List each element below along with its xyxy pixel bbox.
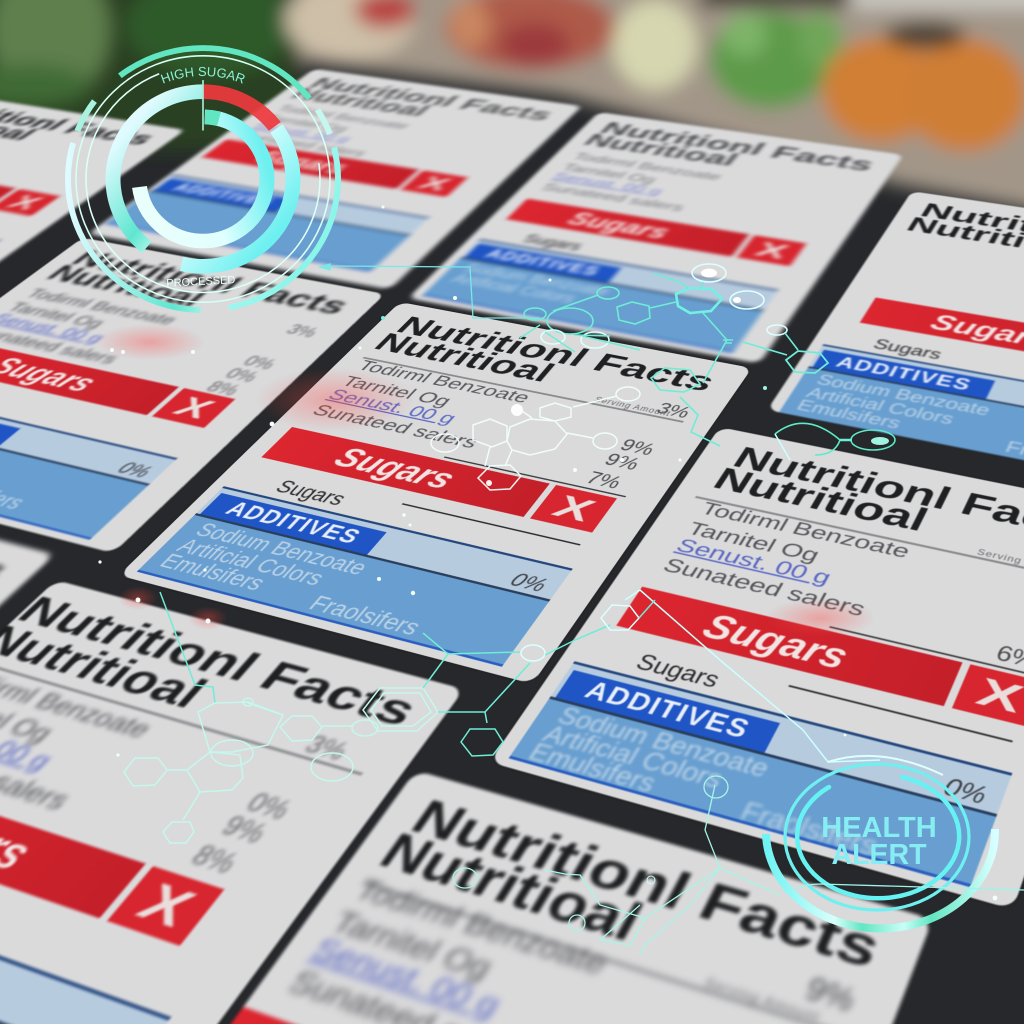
- percent column: 0%: [240, 787, 297, 825]
- ingredient rows: Sunateed salers: [308, 401, 484, 452]
- ingredient rows: Senust. 00 g: [323, 386, 461, 427]
- sugars bar: [198, 138, 471, 199]
- additives panel: [0, 870, 171, 1024]
- gauge label: processed: PROCESSED: [166, 274, 236, 290]
- sugars bar: X: [545, 489, 603, 528]
- sugars bar: [504, 197, 810, 268]
- ingredient rows: Todirml Benzoate: [274, 103, 413, 131]
- percent column: 3%: [282, 321, 322, 340]
- additives panel: ADDITIVES: [833, 354, 975, 394]
- sugars bar: [228, 1004, 302, 1024]
- ingredient rows: Senust. 00 g: [249, 121, 355, 145]
- particles: [98, 206, 997, 900]
- panel: nutrition card lower left: [0, 580, 464, 1024]
- heading: Nutritionl Facts: [401, 791, 889, 980]
- sugars bar: Sugars: [562, 208, 675, 243]
- additives panel: [137, 486, 573, 667]
- percent column: 0%: [221, 365, 263, 385]
- heading: Nutritioal: [706, 462, 934, 538]
- additives panel: Sodium Benzoate: [190, 519, 373, 579]
- ingredient rows: Todirml Benzoate: [22, 286, 182, 328]
- sugars bar: [261, 427, 626, 533]
- connector arrow from gauge: [320, 264, 540, 318]
- sugars label: Sugars: [631, 649, 725, 692]
- sugars bar: Sugars: [326, 442, 463, 495]
- sugars bar: X: [165, 391, 223, 424]
- percent column: [202, 321, 322, 399]
- additives panel: Emulsifers: [523, 738, 662, 798]
- molecule: center white: [431, 387, 640, 490]
- ingredient rows: Senust. 00 g: [549, 170, 666, 197]
- heading: Nutritionl Facts: [7, 590, 428, 736]
- panel: nutrition card upper center: [408, 112, 904, 364]
- percent column: 0%: [239, 353, 280, 373]
- percent column: [976, 547, 1024, 673]
- heading: Nutritionl Facts: [389, 312, 722, 397]
- sugars label: Sugars: [870, 336, 945, 362]
- additives panel: Emulsifers: [793, 396, 904, 432]
- additives panel: Fraolsifers: [304, 592, 426, 640]
- panel: nutrition card center: [119, 302, 752, 684]
- ingredient rows: Senust. 00 g: [672, 534, 835, 589]
- additives panel: ADDITIVES: [169, 181, 278, 209]
- additives panel: Artificial Colors: [448, 271, 580, 306]
- ingredient rows: Tarnitel Og: [260, 113, 352, 134]
- ingredient rows: Tarnitel Og: [3, 299, 110, 331]
- percent column: 3%: [299, 730, 354, 766]
- ingredient rows: Todirml Benzoate: [349, 872, 615, 982]
- additives panel: Emulsifers: [154, 550, 271, 595]
- sugars bar: X: [125, 872, 207, 938]
- heading: Nutritioal: [285, 85, 436, 120]
- outer arcs: [14, 0, 392, 363]
- molecule: upper network: [520, 264, 895, 460]
- additives panel: 0%: [505, 568, 552, 596]
- sugars bar: X: [750, 237, 794, 263]
- additives panel: Fraolsifers: [736, 796, 883, 861]
- additives panel: [0, 196, 1, 296]
- additives panel: 0%: [112, 458, 158, 481]
- additives panel: [0, 390, 178, 540]
- heading: Nutritionl Facts: [304, 75, 559, 124]
- sugars bar: Sugars: [250, 148, 354, 177]
- percent column: 9%: [616, 436, 659, 459]
- heading: Nutritionl Facts: [64, 246, 357, 320]
- panel: nutrition card far upper left: [0, 91, 185, 318]
- gauge label: high sugar: HIGH SUGAR: [160, 66, 245, 84]
- additives panel: [422, 239, 778, 353]
- percent column: Serving Amount: [592, 395, 673, 418]
- additives panel: Artificial Colors: [172, 535, 330, 590]
- gauge: high sugar ring: [14, 0, 392, 363]
- sugars label: Sugars: [520, 232, 586, 253]
- additives panel: [105, 174, 429, 272]
- sugars bar: X: [412, 172, 457, 195]
- inner band: [137, 115, 269, 243]
- percent column: [582, 395, 694, 493]
- ingredient rows: [0, 286, 182, 367]
- percent column: 9%: [600, 450, 644, 474]
- heading: Nutritioal: [369, 824, 652, 953]
- ingredient rows: Tarnitel Og: [559, 161, 660, 186]
- additives panel: ADDITIVES: [579, 677, 755, 744]
- percent column: 8%: [202, 378, 245, 399]
- panel: nutrition card bottom center: [0, 770, 933, 1024]
- heading: Nutritioal: [367, 328, 561, 388]
- sugars bar: [0, 793, 226, 948]
- additives panel: Sodium Benzoate: [813, 371, 993, 419]
- panel: nutrition card far lower left: [0, 466, 55, 975]
- additives panel: [509, 661, 1012, 887]
- percent column: [185, 730, 354, 880]
- badge: health alert: [766, 756, 1024, 929]
- sugars bar: Sugars: [695, 607, 855, 677]
- panel: nutrition card left center: [0, 238, 385, 553]
- additives panel: Sodium Benzoate: [460, 261, 614, 299]
- ingredient rows: [539, 150, 725, 214]
- ingredient rows: [659, 498, 914, 621]
- sugars bar: [616, 586, 1024, 726]
- heading: Nutritioal: [39, 261, 214, 312]
- molecule: lower network: [124, 592, 438, 843]
- red glow accents: [95, 324, 875, 638]
- ingredient rows: [282, 872, 615, 1024]
- ingredient rows: Sunateed salers: [659, 554, 870, 621]
- heading: Nutritionl Facts: [595, 119, 879, 175]
- ingredient rows: Todirml Benzoate: [697, 498, 914, 562]
- additives panel: Sodium Benzoate: [552, 702, 774, 783]
- sugars label: [270, 477, 581, 546]
- middle band: [76, 56, 330, 302]
- ingredient rows: Sunateed salers: [236, 130, 370, 159]
- additives panel: 0%: [940, 772, 991, 810]
- percent column: 9%: [215, 810, 273, 849]
- additives panel: ADDITIVES: [220, 498, 367, 549]
- ingredient rows: Todirml Benzoate: [570, 150, 725, 183]
- badge: health alert: ALERT: [832, 839, 927, 871]
- sugars bar: [0, 347, 236, 429]
- alert text: HEALTH: [821, 812, 937, 844]
- additives panel: [778, 344, 1024, 488]
- sugars bar: X: [0, 191, 50, 214]
- ingredient rows: Todirml Benzoate: [353, 357, 535, 406]
- ingredient rows: Tarnitel Og: [683, 518, 824, 566]
- ingredient rows: Senust. 00 g: [305, 931, 508, 1024]
- molecule: connector lines: [423, 590, 880, 762]
- sugars label: Sugars: [270, 477, 351, 509]
- additives panel: Artificial Colors: [803, 384, 957, 428]
- percent column: 7%: [582, 468, 626, 493]
- percent column: 9%: [800, 970, 861, 1019]
- additives panel: Artificial Colors: [538, 720, 728, 794]
- additives panel: ADDITIVES: [481, 246, 604, 279]
- percent column: 8%: [185, 839, 244, 880]
- panel: nutrition card lower right: [489, 427, 1024, 909]
- ingredient rows: Tarnitel Og: [337, 373, 456, 410]
- percent column: 3%: [653, 400, 694, 421]
- panel: nutrition card upper left behind gauge: [88, 69, 582, 290]
- ingredient rows: Tarnitel Og: [325, 904, 499, 986]
- ingredient rows: Sunateed salers: [539, 181, 688, 214]
- ingredient rows: [308, 357, 535, 452]
- molecule: bottom network: [453, 776, 780, 955]
- ingredient rows: [236, 103, 413, 159]
- ingredient rows: [0, 663, 159, 816]
- sugars label: [631, 649, 1014, 743]
- panel: nutrition card right upper: [767, 191, 1024, 493]
- heading: Nutritioal: [578, 130, 743, 170]
